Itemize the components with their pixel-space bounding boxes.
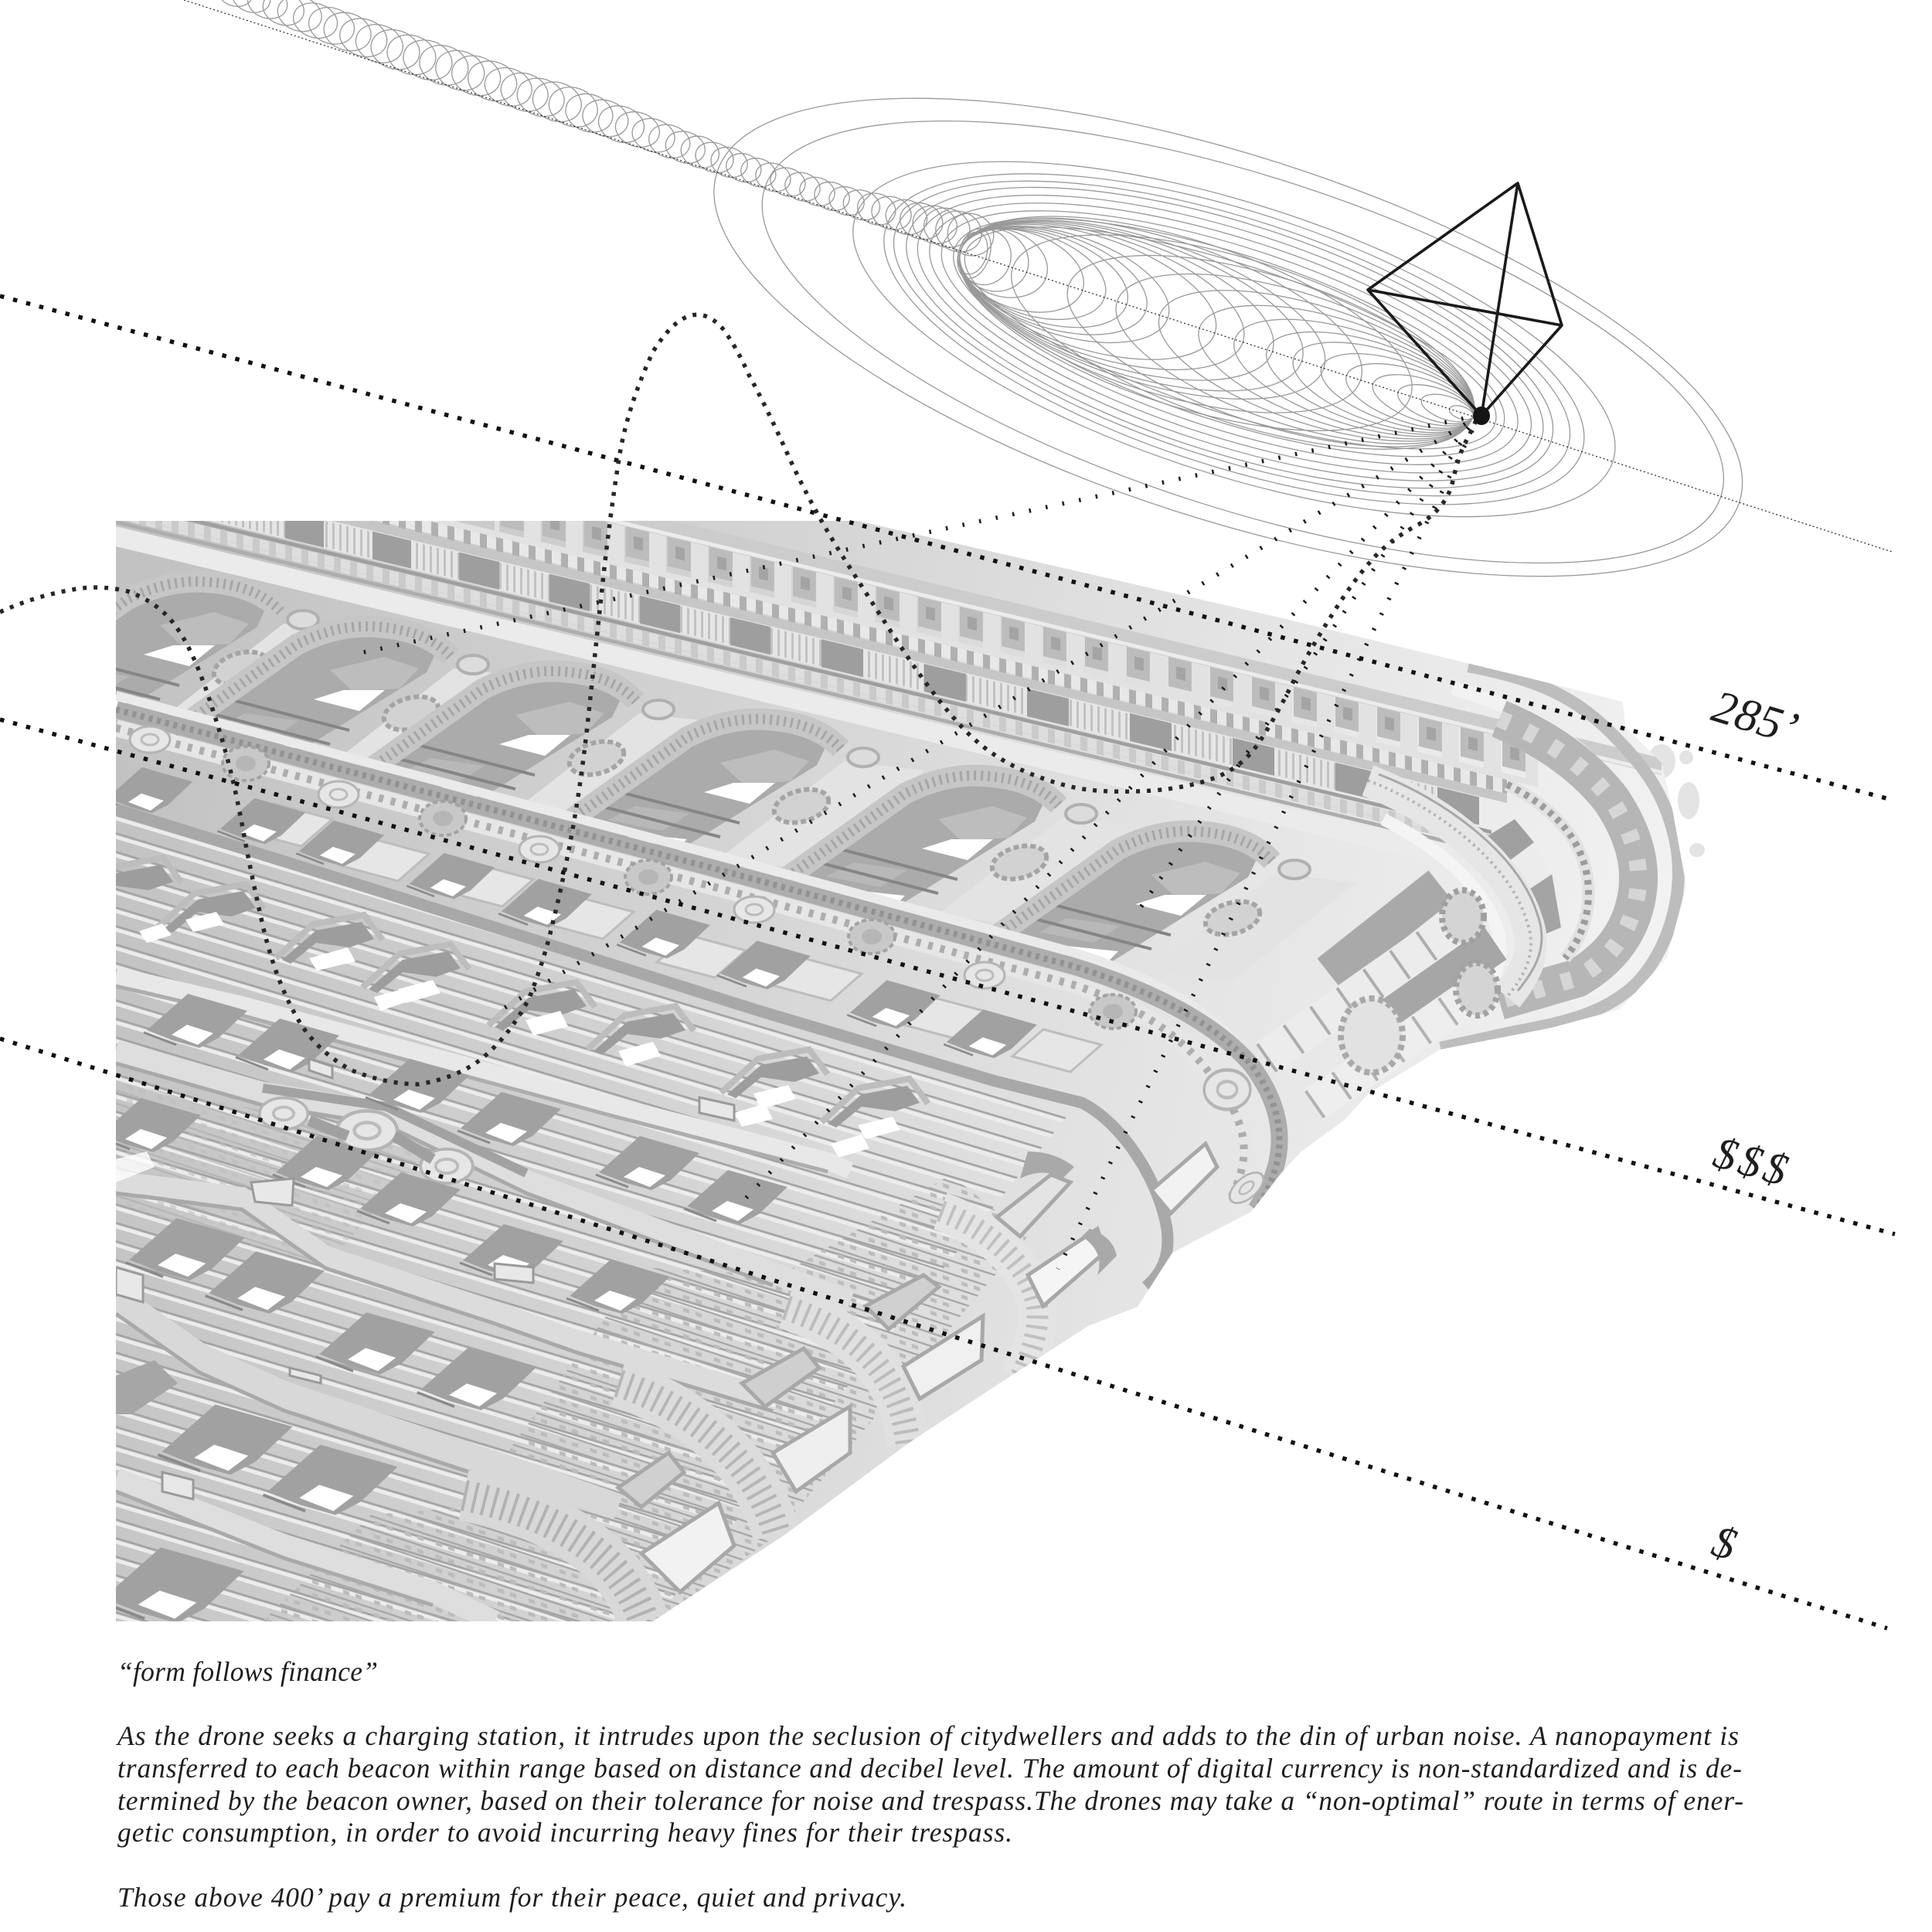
altitude dotted line: 285' [0,296,1895,801]
window rows with glazing [97,994,787,1623]
caption paragraph: termined by the beacon owner, based on their tolerance for noise and trespass.The drones may take a “non-optimal” route in terms of ener- [117,1785,1743,1816]
price dotted line: $$$ [0,719,1895,1234]
rounded corner arcs [464,1211,1038,1621]
nested ellipses around the drone [847,106,1621,573]
flight axis thin dotted line [184,0,1892,552]
horizontal belt courses [116,975,850,1621]
price dotted line: $ [0,1039,1887,1628]
caption paragraph [116,1720,1743,1848]
label: $: $ [1706,1515,1742,1570]
second string course [116,809,1168,1287]
ribbed frieze blocks [210,521,1461,792]
bulged string with medallions [260,1098,473,1183]
small projecting air conditioner boxes [116,1059,734,1499]
outer roll moulding [1440,666,1679,1048]
ellipses converging on the drone [988,190,1498,494]
caption paragraph: transferred to each beacon within range based on distance and decibel level. The amount of digital currency is non-standardized and is de- [117,1753,1742,1784]
frieze ring [1368,781,1531,997]
small brick arches row [75,858,928,1158]
corner ornaments beyond silhouette [1648,744,1705,857]
label: 285': 285’ [1706,680,1804,754]
caption paragraph: As the drone seeks a charging station, it intrudes upon the seclusion of citydwellers and adds to the din of urban noise. A nanopayment is [116,1720,1739,1751]
dark soffit opening [1488,819,1534,859]
modillion soffit ring [1499,719,1638,1001]
caption title: “form follows finance” [117,1656,378,1687]
tube of small flight-path ellipses [210,0,999,261]
big arched windows row [4,581,1356,981]
dark arch heads at corner [1020,1151,1117,1275]
drone position dot [1473,406,1490,425]
drone flight path dotted curve [0,315,1478,1084]
lion head ornaments and medallions [130,726,1269,1209]
brick courses, lower facade [116,811,1079,1621]
label: $$$: $$$ [1708,1127,1794,1196]
corner rotunda soffit [1368,666,1679,1048]
building facade photograph [116,521,1686,1621]
main string course [116,696,1280,1209]
outer noise ellipses [662,0,1795,675]
beacon signal rays from drone [360,415,1480,1269]
cornice, dentils and frieze [116,521,1662,844]
white band [1572,736,1595,754]
windows beneath string course [104,767,1101,1072]
caption closing line: Those above 400’ pay a premium for their peace, quiet and privacy. [117,1882,906,1913]
ornamented voussoir courses [116,1082,1028,1621]
acoustic ellipses along the flight axis [155,0,1795,675]
corner colonnade [1266,886,1498,1105]
dentil ring [1507,784,1589,958]
drone tetrahedron icon [1368,183,1562,425]
dark frieze openings [285,511,1479,825]
ellipses anchored at the tube end [934,172,1436,474]
caption paragraph: getic consumption, in order to avoid incurring heavy fines for their trespass. [117,1817,1012,1848]
curved glazed windows [618,1144,1217,1592]
caption text block [116,1656,1743,1913]
